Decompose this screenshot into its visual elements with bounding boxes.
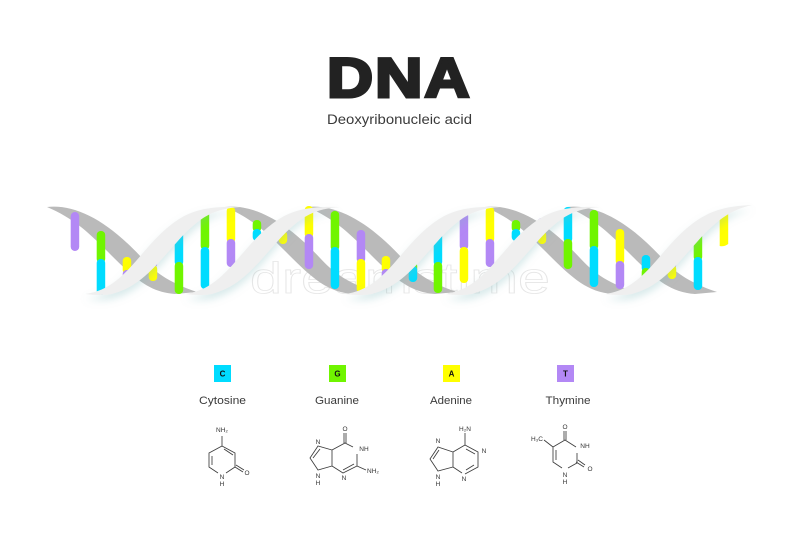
front strands: white xyxy=(85,205,752,295)
molecule: guanine: N xyxy=(316,473,321,480)
subtitle: Deoxyribonucleic acid xyxy=(327,112,472,127)
molecule: guanine: N xyxy=(342,475,347,482)
molecule: guanine: O xyxy=(342,426,348,433)
molecule: adenine: N xyxy=(436,438,441,445)
molecule: adenine: N xyxy=(482,448,487,455)
molecule: guanine xyxy=(310,426,379,487)
molecule: cytosine: N xyxy=(220,474,225,481)
molecule: cytosine: NH₂ xyxy=(216,427,228,434)
title: A xyxy=(424,47,470,109)
molecule: adenine xyxy=(430,426,487,488)
legend: thymine: Thymine xyxy=(546,395,590,407)
molecule: guanine: NH₂ xyxy=(367,468,379,475)
legend: adenine: A xyxy=(449,370,455,378)
legend: guanine: Guanine xyxy=(315,395,359,407)
back strands: grey xyxy=(47,207,717,294)
watermark: dreamstime xyxy=(250,254,550,303)
title: N xyxy=(375,47,422,109)
molecule: thymine: H₃C xyxy=(531,436,543,443)
title: D xyxy=(327,47,373,109)
legend: adenine: Adenine xyxy=(430,395,472,407)
molecule: thymine: H xyxy=(563,479,568,486)
molecule: guanine: H xyxy=(316,480,321,487)
molecule: thymine: N xyxy=(563,472,568,479)
molecule: adenine: H₂N xyxy=(459,426,471,433)
molecule: guanine: NH xyxy=(359,446,369,453)
molecule: adenine: H xyxy=(436,481,441,488)
molecule: cytosine: H xyxy=(220,481,225,488)
legend: adenine xyxy=(430,365,472,407)
base pair bars xyxy=(71,206,728,295)
legend: guanine xyxy=(315,365,359,407)
DNA double helix xyxy=(47,205,752,303)
title xyxy=(327,47,470,109)
molecule: cytosine xyxy=(209,427,250,488)
legend: cytosine: Cytosine xyxy=(199,395,246,407)
legend: guanine: G xyxy=(334,370,341,378)
molecule: adenine: N xyxy=(436,474,441,481)
molecule: thymine: NH xyxy=(580,443,590,450)
legend: cytosine: C xyxy=(220,370,226,378)
molecule: thymine: O xyxy=(562,424,568,431)
legend: thymine xyxy=(546,365,590,407)
molecule: guanine: N xyxy=(316,439,321,446)
molecule: thymine: O xyxy=(587,466,593,473)
molecule: adenine: N xyxy=(462,476,467,483)
legend: thymine: T xyxy=(563,370,568,378)
molecule: thymine xyxy=(531,424,593,486)
legend: cytosine xyxy=(199,365,246,407)
molecule: cytosine: O xyxy=(244,470,250,477)
